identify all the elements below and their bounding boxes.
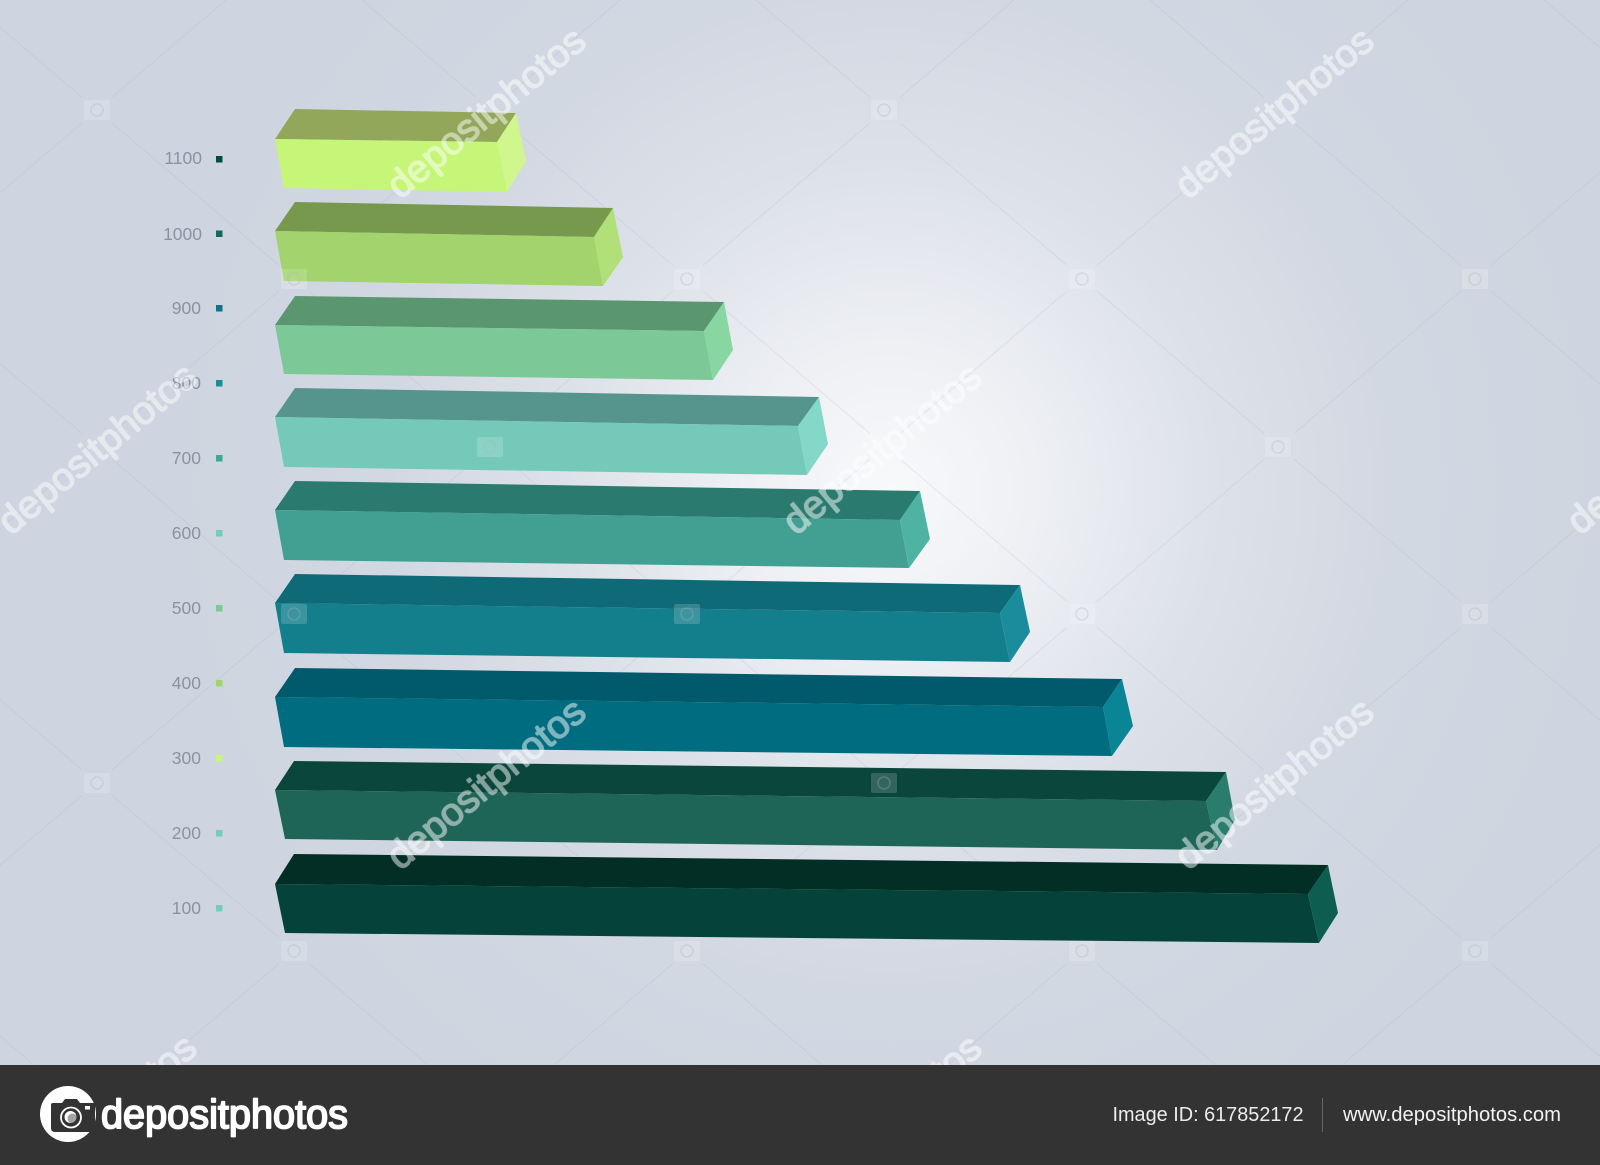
label 200 — [172, 823, 222, 843]
logo wordmark: depositphotos — [101, 1091, 348, 1137]
bar 100 — [275, 854, 1338, 943]
label 300: 300 — [172, 748, 201, 768]
label 900: 900 — [172, 298, 201, 318]
label 700 — [172, 448, 222, 468]
label 200: 200 — [172, 823, 201, 843]
depositphotos diagonal watermarks: depositphotos — [1167, 19, 1382, 207]
label 800: 800 — [172, 373, 201, 393]
label 600: 600 — [172, 523, 201, 543]
watermark camera icons — [84, 100, 1488, 961]
label 100: 100 — [172, 898, 201, 918]
bar 200 — [275, 761, 1235, 850]
image id: Image ID: 617852172 — [1112, 1104, 1304, 1126]
bar 800 — [275, 388, 828, 475]
footer divider — [1322, 1098, 1323, 1132]
bar 900 — [275, 296, 733, 380]
depositphotos diagonal watermarks: depositphotos — [1167, 690, 1382, 878]
depositphotos diagonal watermarks: depositphotos — [379, 19, 594, 207]
bar 400 — [275, 668, 1133, 756]
label 1000: 1000 — [163, 224, 202, 244]
footer bar — [0, 1065, 1600, 1165]
label 300 — [172, 748, 222, 768]
icon: camera logo — [40, 1086, 96, 1142]
label 800 — [172, 373, 222, 393]
label 500: 500 — [172, 598, 201, 618]
label 500 — [172, 598, 222, 618]
depositphotos diagonal watermarks: depositphotos — [775, 355, 990, 543]
bar 1100 — [275, 109, 526, 192]
label 600 — [172, 523, 222, 543]
label 100 — [172, 898, 222, 918]
label 900 — [172, 298, 222, 318]
label 1000 — [163, 224, 222, 244]
website url: www.depositphotos.com — [1342, 1104, 1561, 1126]
axis labels and legend squares — [163, 148, 222, 918]
depositphotos diagonal watermarks: depositphotos — [379, 690, 594, 878]
label 1100 — [164, 148, 222, 168]
bar 500 — [275, 574, 1030, 662]
label 400 — [172, 673, 222, 693]
bar 1000 — [275, 202, 623, 286]
label 400: 400 — [172, 673, 201, 693]
label 700: 700 — [172, 448, 201, 468]
bar 700 — [275, 481, 930, 568]
label 1100: 1100 — [164, 148, 202, 168]
